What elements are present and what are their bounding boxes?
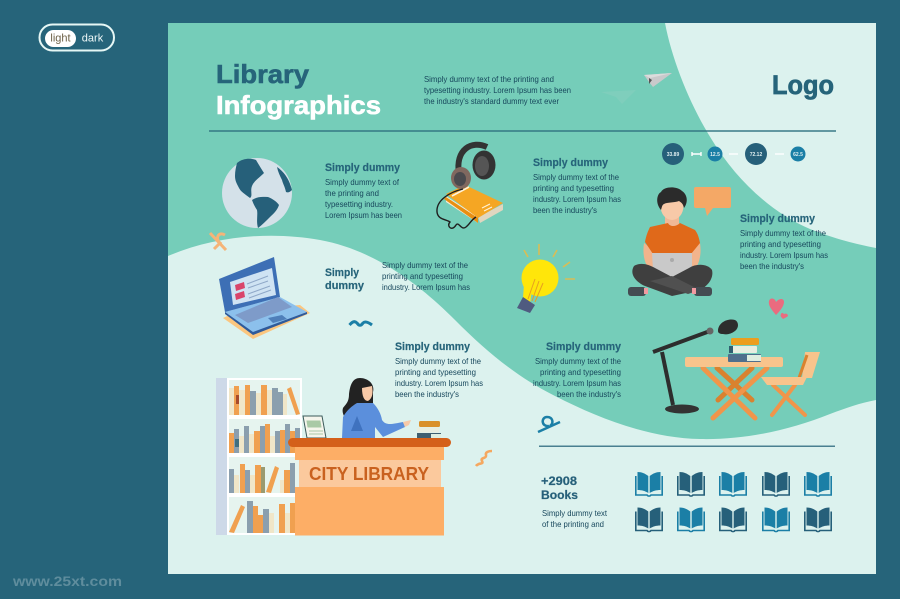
text block: book count: +2908 (541, 474, 577, 488)
shelf 2 books (229, 424, 300, 453)
icon: orange squiggle (476, 451, 492, 466)
icon: light bulb (517, 244, 575, 313)
number timeline: 12.5 (710, 152, 720, 158)
text block: headphones: Simply dummy text of the (533, 172, 619, 182)
text block: person: industry. Lorem Ipsum has (740, 250, 828, 260)
text block: book count: of the printing and (542, 519, 604, 529)
panel: infographic background (168, 23, 876, 574)
text block: headphones (533, 157, 621, 215)
intro text: the industry's standard dummy text ever (424, 96, 559, 106)
book icon grid (636, 472, 831, 532)
text block: laptop: industry. Lorem Ipsum has (382, 282, 470, 292)
icon: person with laptop (628, 187, 731, 296)
text block: laptop (325, 260, 470, 292)
text block: librarian: Simply dummy (395, 341, 471, 353)
icon: globe (222, 158, 292, 228)
text block: laptop: printing and typesetting (382, 271, 463, 281)
text block: person: Simply dummy (740, 213, 816, 225)
text block: laptop: Simply (325, 267, 360, 279)
icon: paper planes (601, 73, 672, 104)
theme toggle: dark (82, 32, 104, 44)
reception desk: CITY LIBRARY (309, 464, 429, 484)
number timeline: 33.89 (667, 152, 679, 158)
icon: table, chair and books (685, 338, 820, 418)
text block: librarian: industry. Lorem Ipsum has (395, 378, 483, 388)
text block: desk: been the industry's (557, 389, 621, 399)
shelf 4 books (229, 501, 295, 533)
theme toggle: light (50, 32, 71, 44)
intro text: Simply dummy text of the printing and (424, 74, 554, 84)
logo: Logo (772, 70, 834, 100)
text block: person: been the industry's (740, 261, 804, 271)
text block: headphones: printing and typesetting (533, 183, 614, 193)
text block: book count: Books (541, 488, 578, 502)
number timeline: 72.12 (750, 152, 762, 158)
icon: hearts (769, 298, 788, 319)
bottom divider (539, 446, 835, 447)
text block: desk: Simply dummy (546, 341, 622, 353)
text block: desk: printing and typesetting (540, 367, 621, 377)
title: Library (216, 59, 310, 89)
text block: globe: Simply dummy (325, 162, 401, 174)
watermark: www.25xt.com (12, 573, 122, 589)
icon: orange knot (210, 233, 226, 250)
icon: books on desk (417, 421, 441, 439)
icon: librarian (342, 378, 411, 438)
text block: desk: Simply dummy text of the (535, 356, 621, 366)
text block: globe: typesetting industry. (325, 199, 393, 209)
icon: desk lamp (653, 320, 738, 414)
intro text (424, 74, 571, 106)
text block: laptop: dummy (325, 280, 365, 292)
text block: headphones: Simply dummy (533, 157, 609, 169)
text block: librarian (395, 341, 483, 399)
text block: person: printing and typesetting (740, 239, 821, 249)
text block: person: Simply dummy text of the (740, 228, 826, 238)
number timeline: 62.5 (793, 152, 803, 158)
text block: headphones: industry. Lorem Ipsum has (533, 194, 621, 204)
reception desk (288, 438, 451, 536)
intro text: typesetting industry. Lorem Ipsum has been (424, 85, 571, 95)
theme toggle (40, 24, 114, 50)
text block: globe: Lorem Ipsum has been (325, 210, 402, 220)
icon: teal loop (538, 417, 560, 432)
shelf 3 books (229, 463, 295, 493)
text block: book count: Simply dummy text (542, 508, 608, 518)
text block: globe (325, 162, 402, 220)
text block: librarian: been the industry's (395, 389, 459, 399)
header divider (209, 130, 836, 132)
text block: laptop: Simply dummy text of the (382, 260, 468, 270)
icon: laptop (219, 257, 310, 339)
text block: headphones: been the industry's (533, 205, 597, 215)
icon: headphones and book (437, 145, 503, 228)
shelf 1 books (229, 385, 300, 415)
number timeline (662, 143, 806, 165)
title: Infographics (216, 90, 381, 120)
icon: bookshelf (216, 378, 302, 535)
text block: book count (541, 474, 608, 529)
text block: librarian: printing and typesetting (395, 367, 476, 377)
text block: globe: Simply dummy text of (325, 177, 400, 187)
text block: globe: the printing and (325, 188, 379, 198)
text block: librarian: Simply dummy text of the (395, 356, 481, 366)
icon: teal squiggle (350, 322, 372, 325)
title (216, 59, 381, 120)
text block: person (740, 213, 828, 271)
icon: clipboard (303, 416, 326, 438)
text block: desk (533, 341, 622, 399)
text block: desk: industry. Lorem Ipsum has (533, 378, 621, 388)
